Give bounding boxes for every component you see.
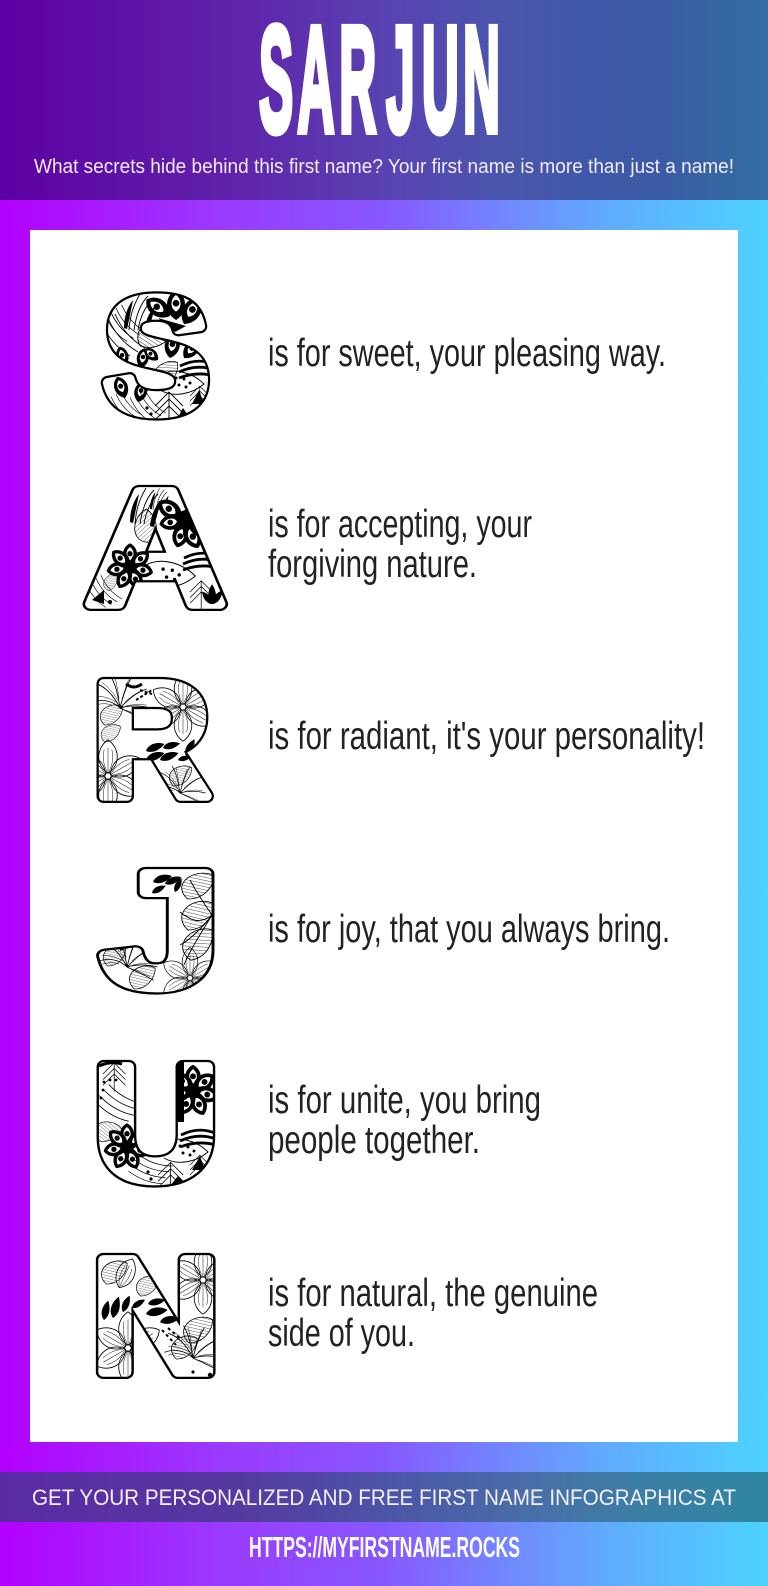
text: N lines: [268, 1272, 598, 1355]
text: N lines: is for natural, the genuine: [268, 1272, 598, 1315]
white panel: [30, 230, 738, 1442]
row: N: [92, 1246, 598, 1388]
text: U lines: is for unite, you bring: [268, 1079, 541, 1122]
text: A lines: is for accepting, your: [268, 503, 532, 546]
subtitle: What secrets hide behind this first name? Your first name is more than just a name!: [34, 156, 734, 178]
text: A lines: [268, 503, 532, 586]
row: U: [94, 1053, 541, 1195]
row: S: [100, 285, 666, 427]
row: R: [93, 670, 705, 812]
text: U lines: [268, 1079, 541, 1162]
footer band: [0, 1472, 768, 1522]
text: A lines: forgiving nature.: [268, 543, 477, 586]
row: A: [82, 478, 532, 620]
header band: [0, 0, 768, 200]
row: J: [96, 862, 670, 1004]
text: N lines: side of you.: [268, 1312, 415, 1355]
text: U lines: people together.: [268, 1119, 480, 1162]
